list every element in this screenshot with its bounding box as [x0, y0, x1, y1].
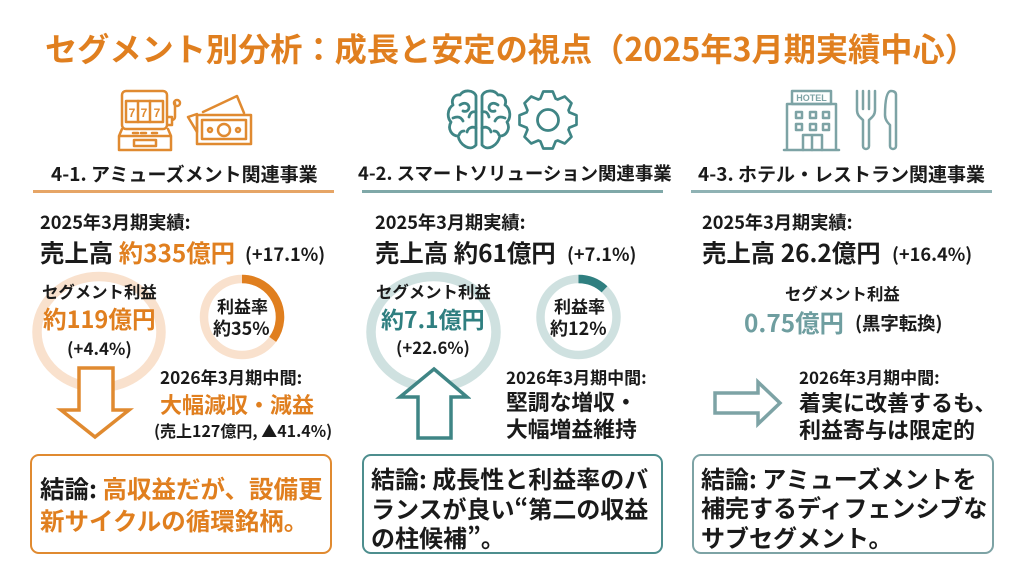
conclusion text: 結論: アミューズメントを	[701, 460, 977, 494]
arrow: up	[395, 366, 471, 440]
divider	[362, 190, 663, 193]
forecast text: 着実に改善するも、	[799, 386, 996, 418]
forecast label: 2026年3月期中間:	[799, 364, 940, 389]
sales growth: (+7.1%)	[567, 241, 636, 267]
icon: hotel and cutlery: HOTEL	[796, 93, 827, 103]
segment profit label: セグメント利益	[42, 279, 157, 303]
forecast text: 大幅増益維持	[506, 412, 637, 444]
margin value: 約35%	[213, 315, 270, 341]
sales figure: 売上高 約335億円	[40, 235, 235, 270]
sales figure: 売上高 26.2億円	[702, 235, 881, 270]
panel: amusement	[30, 90, 334, 554]
margin label: 利益率	[217, 292, 268, 318]
conclusion box	[30, 454, 332, 554]
title: セグメント別分析：成長と安定の視点（2025年3月期実績中心）	[45, 25, 977, 71]
icon: slot machine and cash: 7	[129, 106, 136, 120]
forecast headline: 大幅減収・減益	[160, 388, 314, 420]
margin value: 約12%	[550, 315, 607, 341]
segment profit growth: (+22.6%)	[396, 334, 470, 358]
segment profit value: 約7.1億円	[381, 301, 485, 335]
forecast text: 利益寄与は限定的	[799, 412, 975, 444]
segment profit value: 0.75億円	[744, 305, 844, 340]
forecast label: 2026年3月期中間:	[506, 364, 647, 389]
arrow: down	[56, 366, 134, 440]
heading: 4-2. スマートソリューション関連事業	[358, 160, 672, 186]
conclusion text: 補完するディフェンシブな	[701, 489, 987, 524]
sales growth: (+17.1%)	[245, 241, 325, 267]
conclusion text	[371, 460, 648, 554]
icon: slot machine and cash: 7	[141, 106, 148, 120]
icon: slot machine and cash: 7	[154, 106, 161, 120]
results label: 2025年3月期実績:	[375, 209, 526, 235]
sales growth: (+16.4%)	[892, 241, 972, 267]
divider	[33, 190, 334, 193]
results label: 2025年3月期実績:	[40, 209, 191, 235]
conclusion text	[40, 471, 323, 538]
segment profit label: セグメント利益	[376, 279, 491, 303]
forecast text	[799, 386, 996, 444]
forecast text	[506, 386, 637, 444]
results label: 2025年3月期実績:	[702, 209, 853, 235]
ring chart: segment profit	[366, 272, 501, 388]
conclusion text: ランスが良い“第二の収益	[371, 490, 648, 524]
segment profit growth: (+4.4%)	[67, 334, 132, 360]
icon: brain and gear	[446, 90, 578, 150]
margin label: 利益率	[554, 292, 605, 318]
donut: margin	[200, 274, 284, 360]
forecast text: 堅調な増収・	[506, 386, 637, 417]
icon: hotel and cutlery	[782, 90, 898, 152]
segment profit value: 約119億円	[43, 301, 156, 335]
panel: hotel and restaurant	[691, 90, 996, 554]
conclusion text: サブセグメント。	[701, 518, 893, 554]
conclusion text: 結論: 高収益だが、設備更	[40, 471, 323, 506]
conclusion box	[692, 454, 994, 554]
conclusion box	[362, 454, 663, 554]
turnaround note: (黒字転換)	[855, 310, 942, 336]
conclusion text: 新サイクルの循環銘柄。	[40, 503, 308, 538]
conclusion text	[701, 460, 987, 554]
ring chart: segment profit	[32, 272, 166, 390]
heading: 4-1. アミューズメント関連事業	[51, 160, 318, 187]
icon: slot machine and cash	[118, 90, 252, 152]
arrow: right	[713, 378, 782, 428]
forecast detail: (売上127億円, ▲41.4%)	[154, 418, 332, 442]
heading: 4-3. ホテル・レストラン関連事業	[698, 160, 985, 187]
forecast label: 2026年3月期中間:	[160, 364, 302, 389]
conclusion text: の柱候補”。	[371, 519, 505, 554]
donut: margin	[536, 274, 621, 360]
conclusion text: 結論: 成長性と利益率のバ	[371, 460, 648, 495]
divider	[691, 190, 992, 193]
sales figure: 売上高 約61億円	[375, 235, 556, 270]
panel: smart solutions	[358, 90, 672, 554]
segment profit label: セグメント利益	[785, 281, 900, 305]
